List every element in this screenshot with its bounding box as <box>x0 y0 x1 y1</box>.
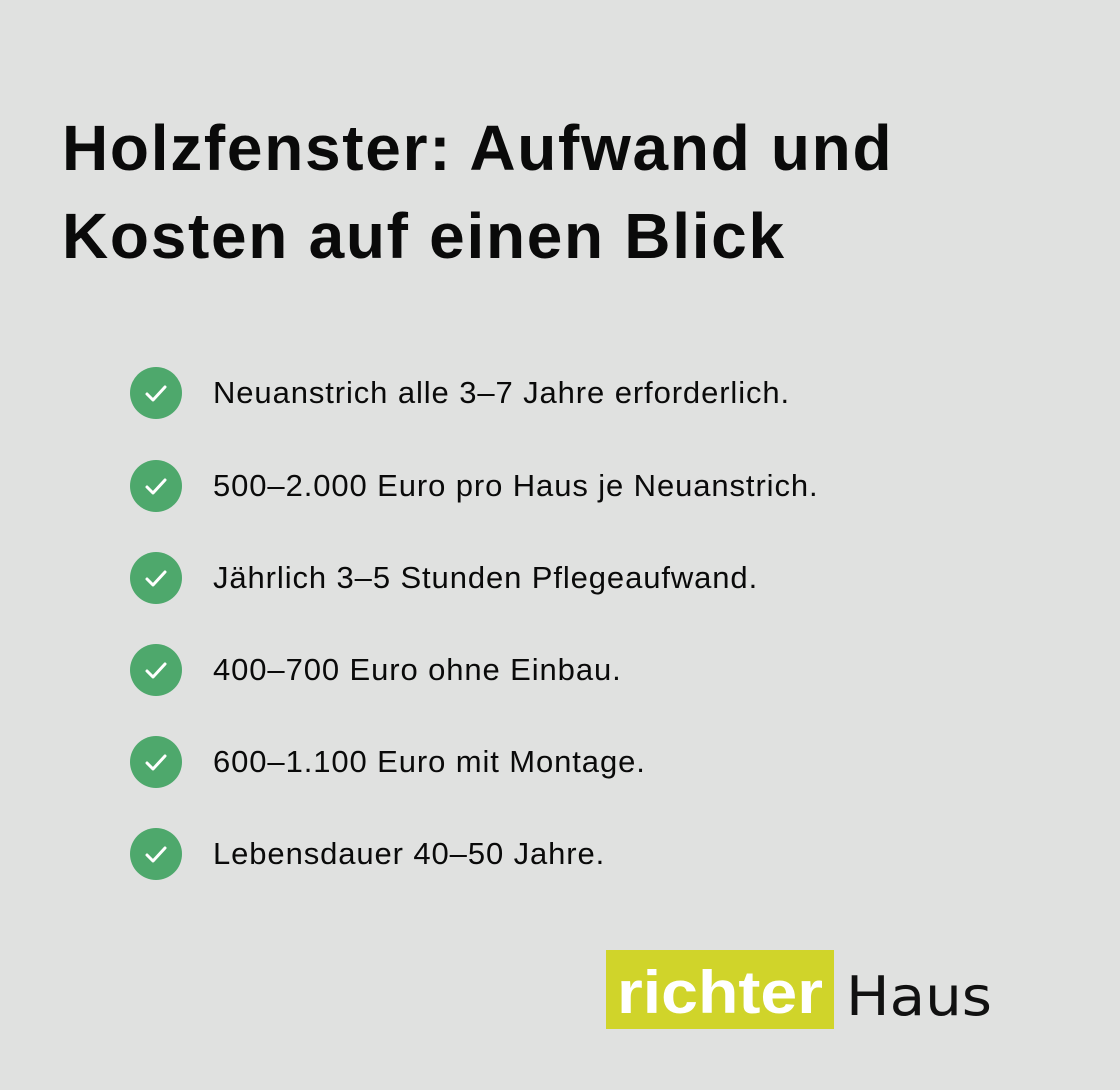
item 2: 500–2.000 Euro pro Haus je Neuanstrich. <box>213 468 819 503</box>
item 4: 400–700 Euro ohne Einbau. <box>213 652 622 687</box>
item 6 <box>130 828 605 880</box>
item 1: Neuanstrich alle 3–7 Jahre erforderlich. <box>213 375 790 410</box>
title: Kosten auf einen Blick <box>62 200 786 272</box>
item 1 <box>130 367 790 419</box>
title: Holzfenster: Aufwand und <box>62 112 893 184</box>
item 5: 600–1.100 Euro mit Montage. <box>213 744 646 779</box>
logo: richter Haus: Haus <box>846 965 992 1028</box>
title <box>62 112 893 272</box>
item 4 <box>130 644 622 696</box>
item 6: Lebensdauer 40–50 Jahre. <box>213 836 605 871</box>
item 2 <box>130 460 819 512</box>
logo: richter Haus <box>606 950 992 1029</box>
item 3: Jährlich 3–5 Stunden Pflegeaufwand. <box>213 560 758 595</box>
item 3 <box>130 552 758 604</box>
item 5 <box>130 736 646 788</box>
logo: richter Haus: richter <box>617 959 823 1026</box>
